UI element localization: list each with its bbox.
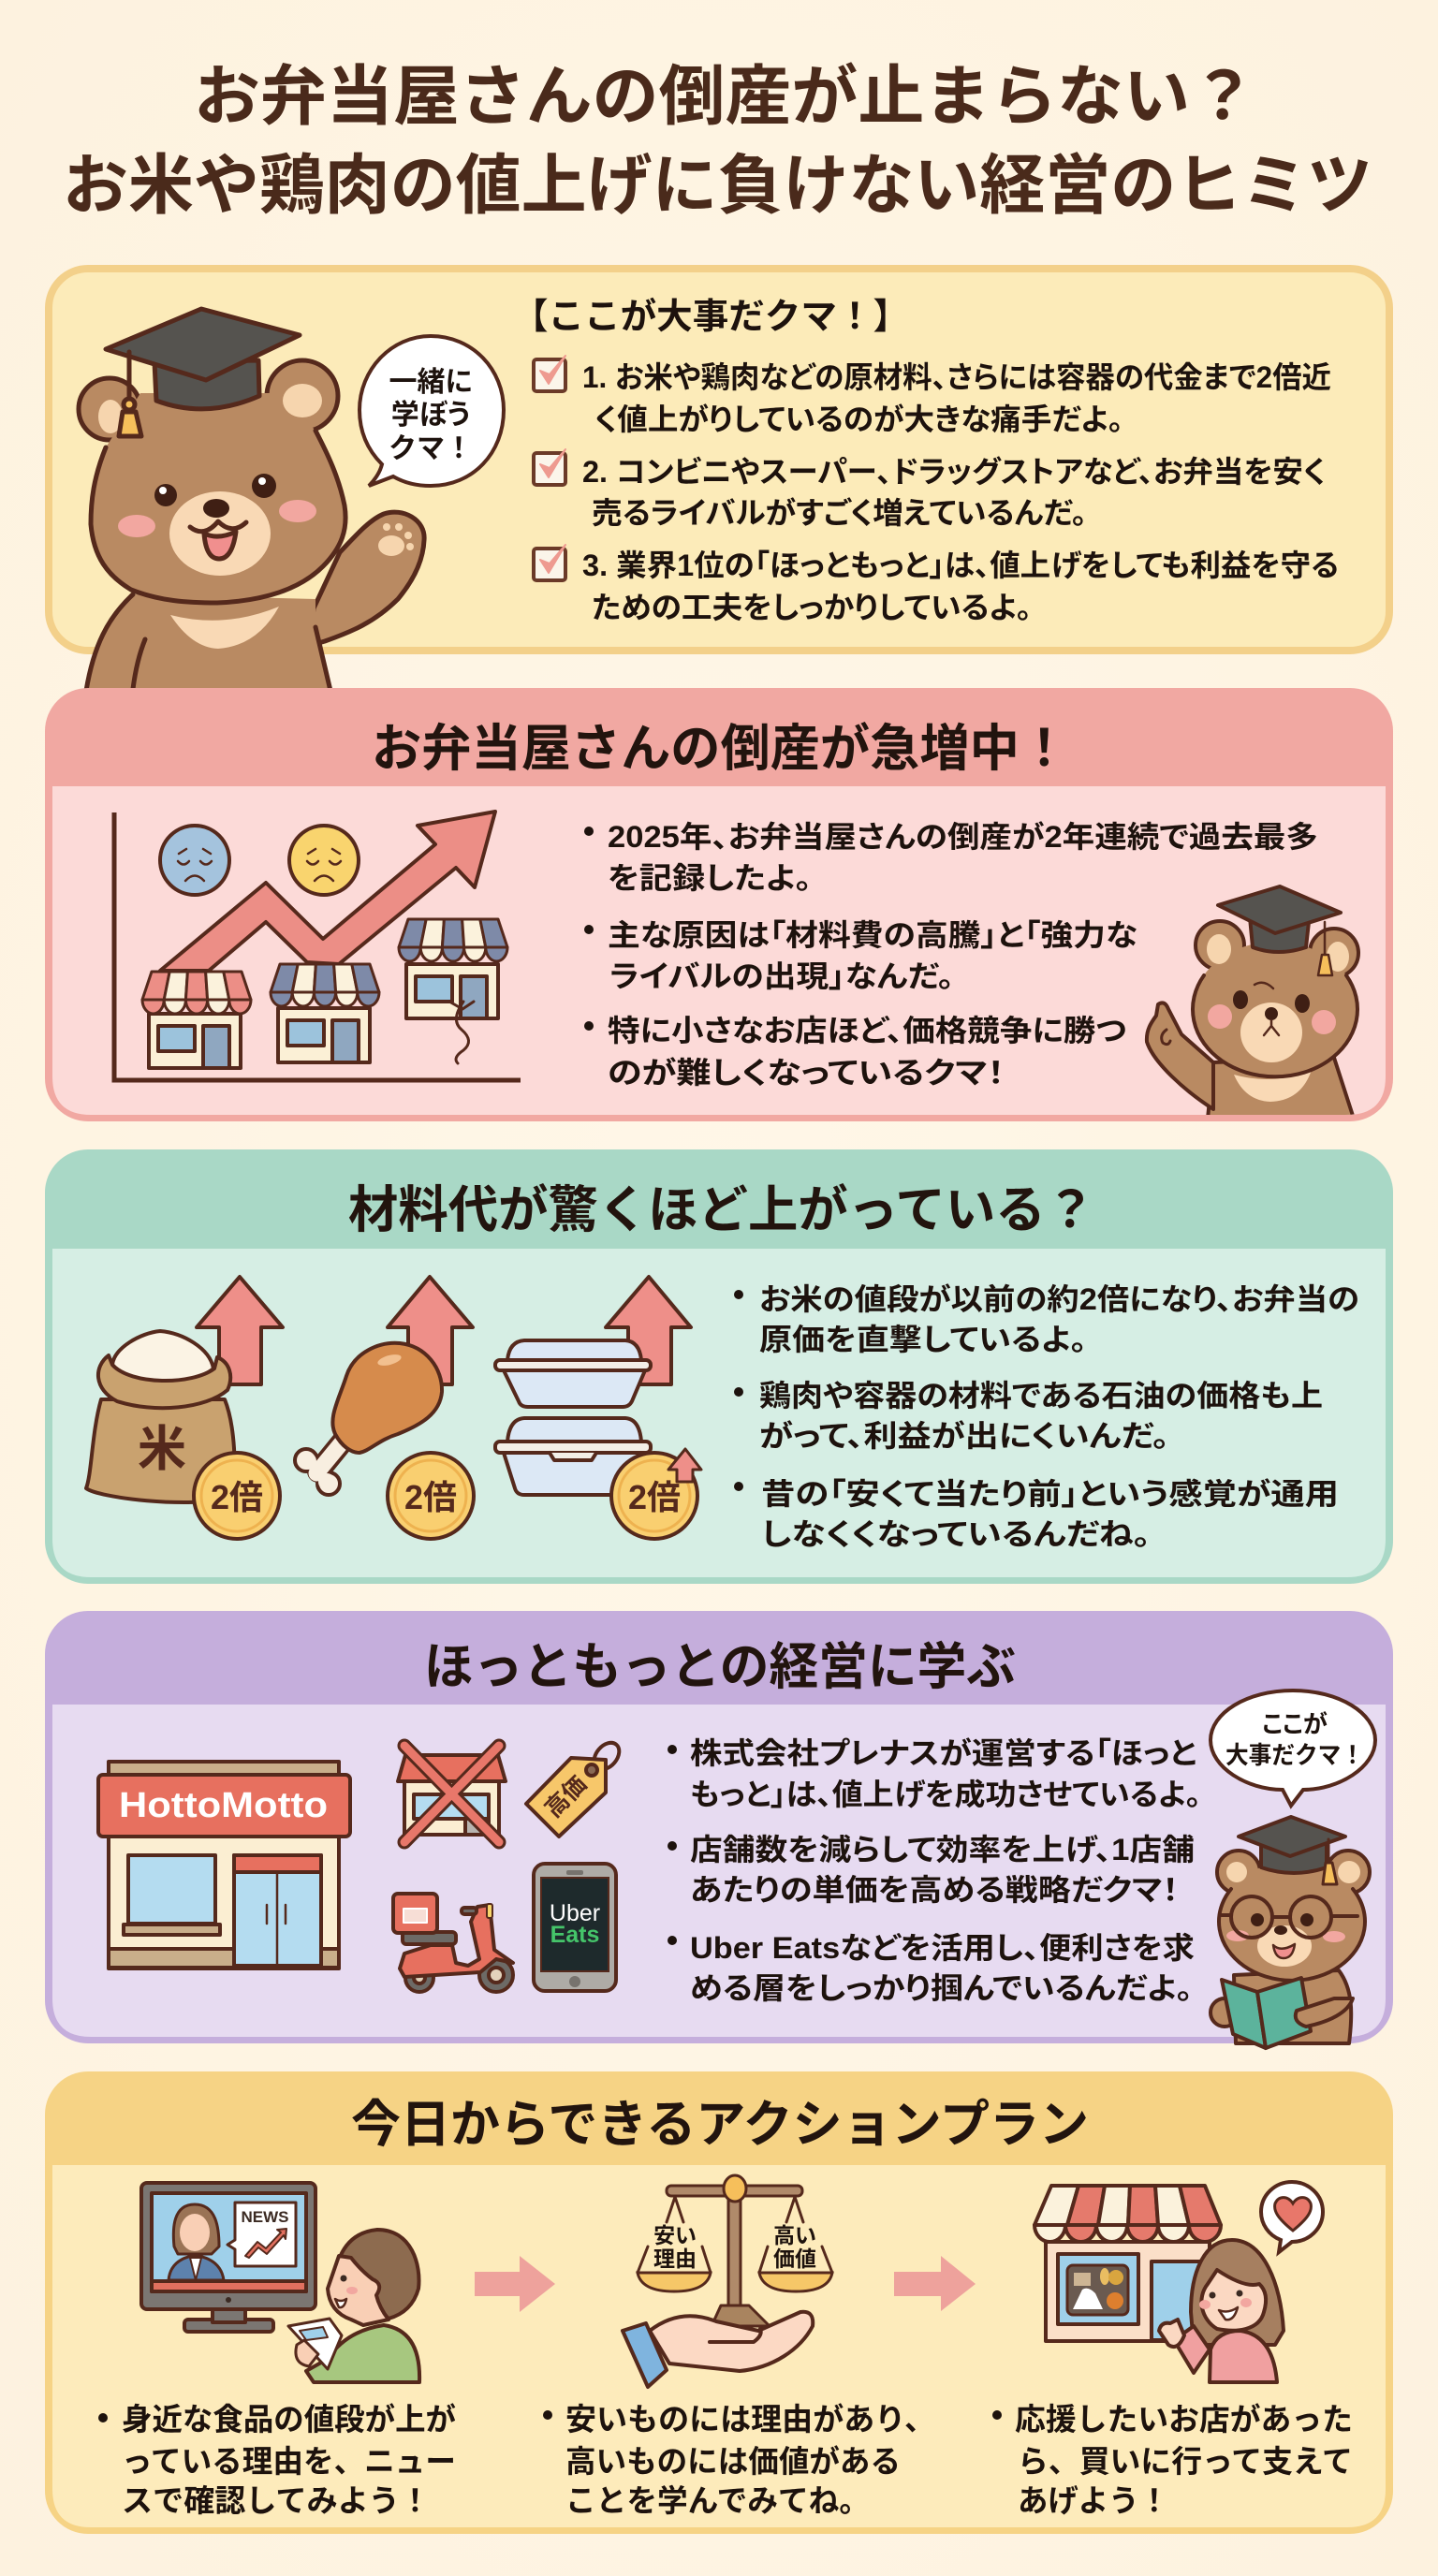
- icon: news on monitor and viewer: NEWS: [242, 2208, 288, 2226]
- icon: waving graduate bear: [79, 309, 424, 691]
- checklist item 1: [534, 356, 1331, 436]
- text block: material costs: 原価を直撃しているよ。: [759, 1323, 1087, 1356]
- text block: step 1: [98, 2402, 456, 2518]
- icon: worried pointing bear: [1147, 886, 1358, 1119]
- icon: rice sack: [86, 1331, 235, 1502]
- checklist item 3: 3. 業界1位の「ほっともっと」は、値上げをしても利益を守る: [582, 549, 1339, 582]
- text block: material costs: がって、利益が出にくいんだ。: [759, 1419, 1169, 1453]
- panel: learning from Hotto Motto: [45, 1611, 1393, 2048]
- icon: Hotto Motto storefront: HottoMotto: [119, 1786, 328, 1825]
- text block: step 1: 身近な食品の値段が上が: [122, 2402, 456, 2437]
- text block: step 3: [992, 2402, 1353, 2518]
- text block: Hotto Motto: める層をしっかり掴んでいるんだよ。: [690, 1971, 1193, 2005]
- icon: rice sack: 米: [138, 1423, 186, 1477]
- icon: rising arrow: [160, 812, 495, 971]
- text block: material costs: お米の値段が以前の約2倍になり、お弁当の: [759, 1282, 1359, 1316]
- icon: scale on hand: [623, 2175, 832, 2387]
- icon: 2x coin chicken: 2倍: [404, 1478, 457, 1516]
- text block: step 2: 高いものには価値がある: [565, 2444, 901, 2479]
- icon: price tag: [526, 1738, 624, 1837]
- text block: Hotto Motto: Uber Eatsなどを活用し、便利さを求: [690, 1931, 1195, 1965]
- text block: bankruptcies: を記録したよ。: [608, 861, 812, 895]
- icon: smartphone Uber Eats: [534, 1864, 616, 1991]
- panel: bankruptcies rising: [45, 688, 1393, 1121]
- icon: Hotto Motto storefront: [98, 1762, 350, 1969]
- icon: 2x coin rice: [194, 1453, 280, 1539]
- heading: action plan: 今日からできるアクションプラン: [351, 2097, 1089, 2153]
- icon: up arrows: [197, 1277, 691, 1384]
- text block: material costs: [734, 1282, 1359, 1551]
- text block: Hotto Motto: あたりの単価を高める戦略だクマ！: [690, 1873, 1179, 1907]
- text block: bankruptcies: 主な原因は「材料費の高騰」と「強力な: [608, 918, 1137, 952]
- text block: step 3: ら、買いに行って支えて: [1018, 2444, 1353, 2479]
- arrow: step 1 to 2: [475, 2256, 555, 2312]
- text block: Hotto Motto: [668, 1736, 1201, 2005]
- text block: material costs: しなくくなっているんだね。: [761, 1517, 1151, 1551]
- title: お米や鶏肉の値上げに負けない経営のヒミツ: [63, 149, 1372, 222]
- text block: step 1: っている理由を、ニュー: [122, 2444, 456, 2479]
- arrow: step 2 to 3: [894, 2256, 976, 2311]
- text block: bankruptcies: 2025年、お弁当屋さんの倒産が2年連続で過去最多: [608, 820, 1318, 854]
- icon: reading bear with glasses: [1211, 1817, 1370, 2048]
- text block: step 2: 安いものには理由があり、: [565, 2402, 935, 2437]
- checklist item 2: 2. コンビニやスーパー、ドラッグストアなど、お弁当を安く: [582, 455, 1326, 489]
- icon: scale on hand: 安い: [653, 2223, 697, 2247]
- checklist item 3: ための工夫をしっかりしているよ。: [592, 591, 1032, 624]
- heading: key points: 【ここが大事だクマ！】: [512, 298, 909, 337]
- text block: step 3: あげよう！: [1018, 2483, 1169, 2518]
- heading: Hotto Motto: ほっともっとの経営に学ぶ: [424, 1639, 1016, 1695]
- text block: bankruptcies: のが難しくなっているクマ！: [608, 1056, 1005, 1090]
- checklist item 1: く値上がりしているのが大きな痛手だよ。: [594, 402, 1123, 436]
- icon: price tag: 高価: [540, 1771, 592, 1822]
- icon: delivery scooter: [393, 1894, 513, 1992]
- icon: scale on hand: 価値: [773, 2247, 816, 2271]
- icon: blue sad face: [160, 826, 229, 895]
- text block: material costs: 鶏肉や容器の材料である石油の価格も上: [759, 1379, 1323, 1412]
- text block: bankruptcies: [584, 820, 1318, 1090]
- checklist item 3: [534, 545, 1339, 624]
- text block: Hotto Motto: 株式会社プレナスが運営する「ほっと: [690, 1736, 1196, 1770]
- speech bubble: 一緒に学ぼうクマ！: 一緒に: [389, 367, 473, 398]
- text block: Hotto Motto: 店舗数を減らして効率を上げ、1店舗: [690, 1833, 1195, 1866]
- checklist item 1: 1. お米や鶏肉などの原材料、さらには容器の代金まで2倍近: [582, 360, 1331, 394]
- text block: Hotto Motto: もっと」は、値上げを成功させているよ。: [690, 1778, 1201, 1811]
- icon: 2x coin rice: 2倍: [211, 1478, 263, 1516]
- heading: material costs: 材料代が驚くほど上がっている？: [348, 1182, 1095, 1238]
- speech bubble: 一緒に学ぼうクマ！: 学ぼう: [391, 400, 470, 431]
- title: [63, 60, 1372, 222]
- panel: key points: [49, 269, 1389, 691]
- icon: crossed out store: [398, 1746, 506, 1842]
- icon: 2x coin containers: [611, 1449, 701, 1539]
- icon: smartphone Uber Eats: Uber: [550, 1900, 600, 1926]
- text block: step 3: 応援したいお店があった: [1015, 2402, 1353, 2437]
- text block: bankruptcies: ライバルの出現」なんだ。: [609, 959, 954, 993]
- speech bubble: 一緒に学ぼうクマ！: クマ！: [389, 433, 473, 464]
- icon: stacked bento containers: [495, 1340, 651, 1495]
- speech bubble: ここが大事だクマ！: 大事だクマ！: [1225, 1741, 1364, 1769]
- icon: smartphone Uber Eats: Eats: [550, 1922, 599, 1948]
- heading: bankruptcies rising: お弁当屋さんの倒産が急増中！: [372, 721, 1069, 777]
- panel: action plan: [45, 2071, 1393, 2534]
- checklist item 2: 売るライバルがすごく増えているんだ。: [592, 496, 1087, 530]
- icon: scale on hand: 高い: [773, 2223, 816, 2247]
- checklist item 2: [534, 449, 1326, 530]
- icon: scale on hand: 理由: [653, 2247, 697, 2271]
- text block: bankruptcies: 特に小さなお店ほど、価格競争に勝つ: [608, 1014, 1126, 1047]
- text block: step 2: [543, 2402, 935, 2518]
- icon: 2x coin chicken: [388, 1453, 474, 1539]
- icon: chicken drumstick: [295, 1343, 442, 1495]
- icon: news on monitor and viewer: [141, 2183, 419, 2382]
- speech bubble: ここが大事だクマ！: ここが: [1262, 1710, 1328, 1738]
- icon: heart speech bubble: [1261, 2182, 1323, 2252]
- icon: shop and customer: [1034, 2186, 1284, 2382]
- speech bubble: 一緒に学ぼうクマ！: [360, 336, 504, 486]
- speech bubble: ここが大事だクマ！: [1211, 1690, 1375, 1806]
- chart: rising line over shops: [114, 812, 521, 1080]
- text block: step 1: スで確認してみよう！: [122, 2483, 431, 2518]
- panel: material costs: [45, 1149, 1393, 1584]
- icon: yellow sad face: [289, 826, 359, 895]
- text block: material costs: 昔の「安くて当たり前」という感覚が通用: [761, 1477, 1339, 1511]
- title: お弁当屋さんの倒産が止まらない？: [194, 60, 1256, 133]
- text block: step 2: ことを学んでみてね。: [565, 2483, 870, 2518]
- icon: 2x coin containers: 2倍: [628, 1478, 681, 1516]
